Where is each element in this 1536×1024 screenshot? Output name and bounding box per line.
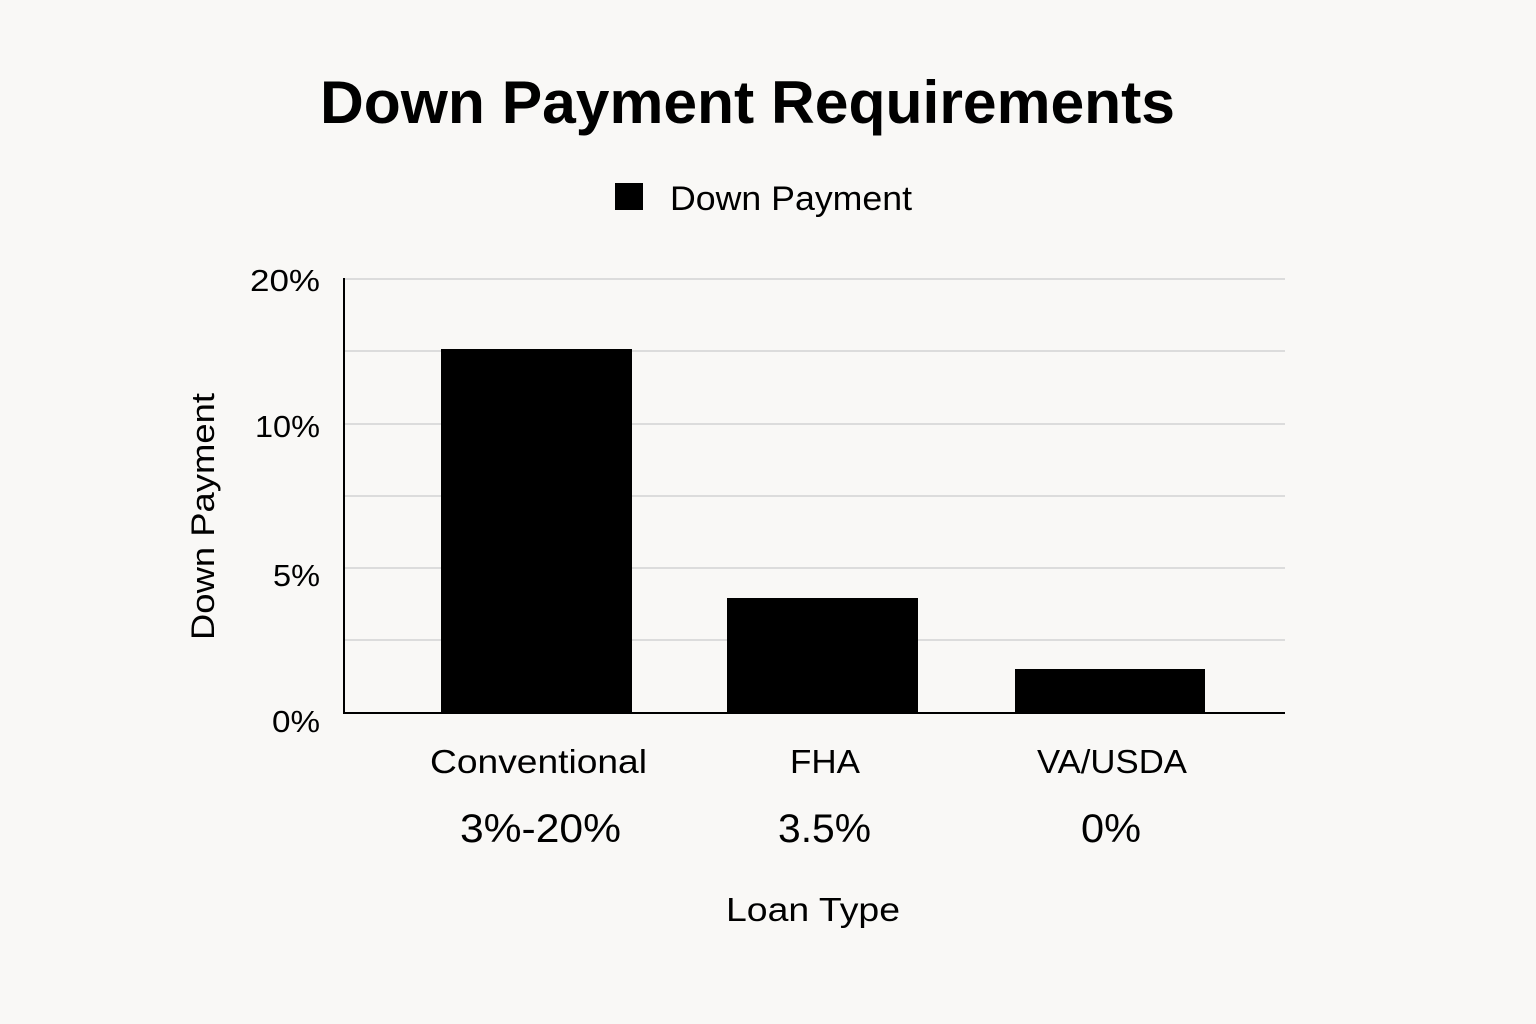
x-axis title: Loan Type xyxy=(726,891,900,928)
bar: Conventional xyxy=(441,349,632,713)
category labels: FHA xyxy=(790,743,860,780)
y-axis tick labels xyxy=(250,263,320,739)
bar: VA/USDA xyxy=(1015,669,1205,713)
y-axis tick labels: 5% xyxy=(273,558,320,593)
axes xyxy=(344,278,1285,714)
category labels: Conventional xyxy=(430,743,647,780)
y-axis title: Down Payment xyxy=(185,393,221,640)
value labels xyxy=(460,807,1141,851)
y-axis tick labels: 0% xyxy=(272,704,320,739)
category labels xyxy=(430,743,1187,780)
value labels: 0% xyxy=(1081,807,1141,851)
legend: Down Payment xyxy=(670,180,913,218)
value labels: 3.5% xyxy=(778,807,871,851)
y-axis tick labels: 10% xyxy=(255,409,320,444)
bar: FHA xyxy=(727,598,918,713)
y-axis tick labels: 20% xyxy=(250,263,320,298)
category labels: VA/USDA xyxy=(1037,743,1187,780)
value labels: 3%-20% xyxy=(460,807,621,851)
title: Down Payment Requirements xyxy=(320,69,1175,136)
